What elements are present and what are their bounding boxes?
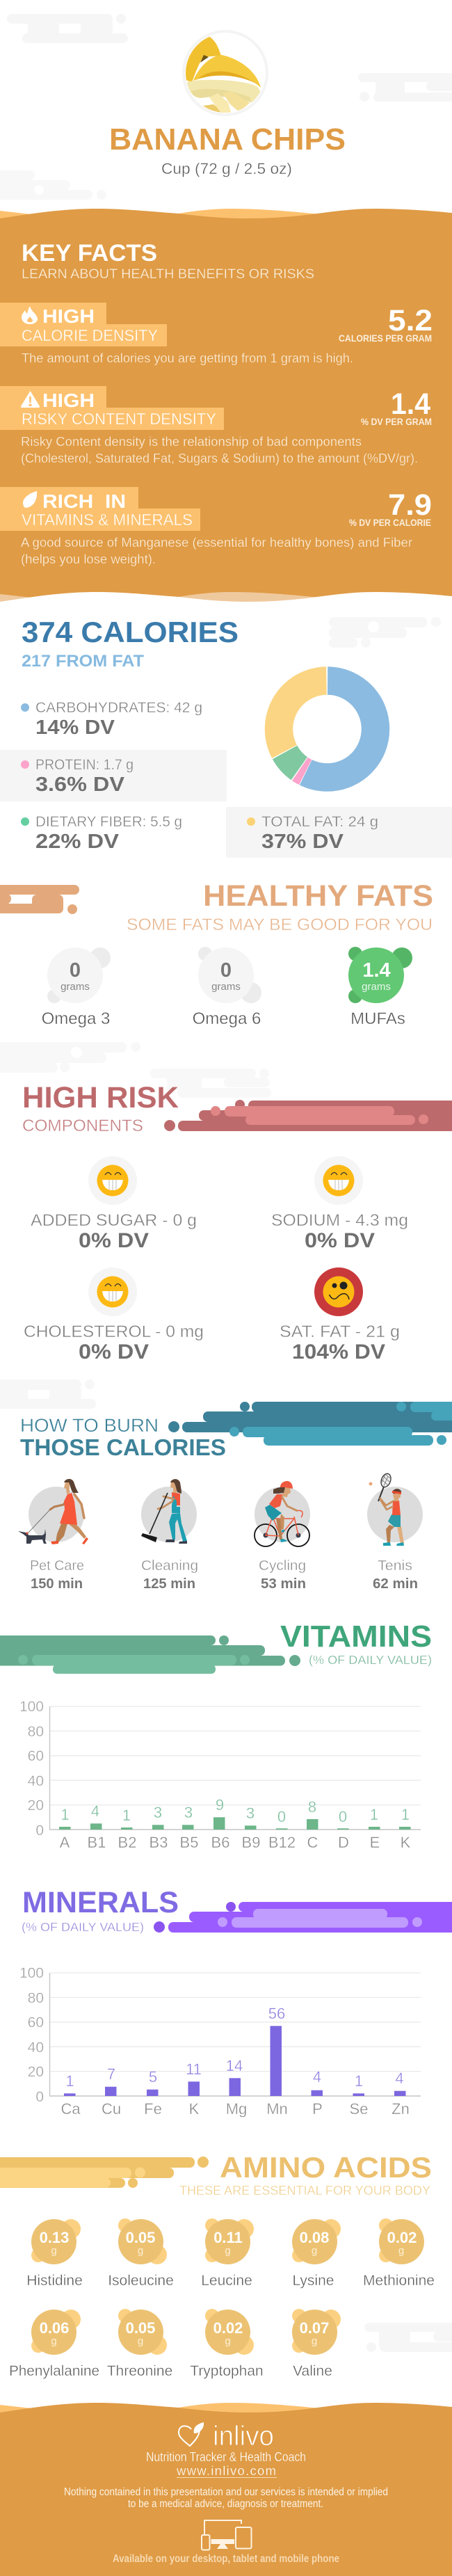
grid <box>50 1706 421 1805</box>
subheading: from fat: 217 FROM FAT <box>22 652 144 671</box>
bar values: 56 <box>268 2005 285 2022</box>
amino: leucine <box>201 2218 254 2289</box>
y axis labels: 40 <box>28 2040 44 2056</box>
omega 6 badge: grams <box>211 981 241 993</box>
heading: key facts: KEY FACTS <box>22 240 157 266</box>
wave top light <box>0 209 320 220</box>
x axis labels: Ca <box>60 2100 81 2118</box>
activity: cycling <box>255 1481 310 1592</box>
risk item: cholesterol: 0% DV <box>79 1341 149 1363</box>
omega 6 badge: 0 <box>220 959 232 982</box>
logo: heart and leaf <box>179 2422 204 2446</box>
legend: dietary fiber <box>21 814 182 853</box>
x axis labels: K <box>189 2100 200 2118</box>
y axis labels: 20 <box>28 2064 44 2080</box>
bar values <box>65 2005 404 2090</box>
unit: % DV PER CALORIE <box>349 518 431 528</box>
bar values: 5 <box>149 2068 157 2086</box>
background cloud <box>329 617 441 648</box>
icon: leaf <box>23 491 37 508</box>
bar values: 3 <box>154 1804 162 1821</box>
panel: vitamins <box>0 1619 432 1851</box>
x axis labels: Mn <box>266 2100 288 2118</box>
x axis labels: P <box>312 2100 323 2118</box>
disclaimer: Nothing contained in this presentation and our services is intended or implied <box>64 2486 388 2498</box>
amino: histidine <box>26 2219 83 2289</box>
unit: CALORIES PER GRAM <box>339 333 432 344</box>
legend: protein: PROTEIN: 1.7 g <box>35 757 134 773</box>
activity: pet care: Pet Care <box>30 1558 84 1574</box>
heading: VITAMINS <box>280 1619 432 1654</box>
y axis labels: 100 <box>19 1699 44 1715</box>
label background <box>0 487 200 531</box>
background cloud top left <box>7 14 128 43</box>
unit: % DV PER GRAM <box>361 417 432 427</box>
x axis labels: A <box>60 1834 70 1851</box>
y axis labels: 100 <box>19 1965 44 1981</box>
bar values: 1 <box>60 1806 70 1823</box>
amino: lysine: 0.08 <box>300 2229 329 2246</box>
x axis labels <box>60 2100 410 2118</box>
activity: cleaning: Cleaning <box>141 1558 198 1574</box>
risk item: cholesterol <box>24 1267 204 1363</box>
amino: phenylalanine: g <box>51 2335 57 2347</box>
panel: minerals <box>19 1886 452 2118</box>
name: CALORIE DENSITY <box>22 326 158 344</box>
x axis labels: C <box>307 1834 318 1851</box>
legend: total fat <box>247 814 378 853</box>
amino: histidine: g <box>51 2245 57 2257</box>
value: 5.2 <box>388 304 433 337</box>
activity: cleaning: 125 min <box>143 1576 195 1592</box>
gray row total fat <box>226 807 452 858</box>
amino: valine: Valine <box>293 2363 332 2379</box>
subheading: (% OF DAILY VALUE) <box>22 1920 144 1934</box>
background cloud above burn section <box>0 1379 96 1409</box>
level: HIGH <box>42 305 95 327</box>
disclaimer <box>64 2486 388 2510</box>
label background <box>0 386 224 430</box>
x axis labels: Cu <box>102 2100 121 2118</box>
legend: carbohydrates: 14% DV <box>35 717 115 739</box>
bar values: 4 <box>91 1802 99 1820</box>
mufas badge <box>348 947 412 1028</box>
bar values: 1 <box>401 1806 410 1823</box>
amino: threonine: 0.05 <box>126 2319 155 2337</box>
amino: lysine: Lysine <box>293 2273 334 2289</box>
bar values: 8 <box>308 1798 316 1816</box>
fact: rich in vitamins and minerals <box>0 487 432 566</box>
availability note: Available on your desktop, tablet and mobile phone <box>113 2553 339 2565</box>
level: RICH IN <box>42 490 126 512</box>
mufas badge: MUFAs <box>350 1009 405 1028</box>
illustration: woman cycling <box>255 1481 310 1546</box>
heading line 2: THOSE CALORIES <box>20 1434 226 1460</box>
background cloud <box>364 2323 452 2352</box>
bar values: 9 <box>216 1796 224 1814</box>
y axis labels: 20 <box>28 1798 44 1814</box>
x axis labels: B6 <box>211 1834 229 1851</box>
description <box>21 536 412 566</box>
legend: total fat: 37% DV <box>261 831 344 853</box>
risk item: added sugar: 0% DV <box>79 1229 149 1252</box>
axes <box>50 1706 421 1830</box>
x axis labels: D <box>338 1834 349 1851</box>
tagline: Nutrition Tracker & Health Coach <box>146 2449 306 2464</box>
activity: tennis: Tenis <box>378 1558 412 1574</box>
icon: flame <box>22 306 38 324</box>
x axis labels: Fe <box>144 2100 162 2118</box>
amino: lysine <box>292 2219 341 2289</box>
illustration: man playing tennis <box>367 1472 423 1546</box>
risk item: saturated fat: 104% DV <box>292 1341 385 1363</box>
amino: isoleucine: Isoleucine <box>108 2273 174 2289</box>
bar values: 0 <box>277 1808 286 1825</box>
description: A good source of Manganese (essential for healthy bones) and Fiber <box>21 536 412 550</box>
amino: phenylalanine: 0.06 <box>40 2319 69 2337</box>
amino: threonine: g <box>138 2335 143 2347</box>
x axis labels: Mg <box>226 2100 247 2118</box>
risk item: added sugar: ADDED SUGAR - 0 g <box>31 1211 197 1230</box>
subheading: LEARN ABOUT HEALTH BENEFITS OR RISKS <box>22 266 314 282</box>
decorative cloud <box>168 1402 452 1446</box>
amino: phenylalanine: Phenylalanine <box>9 2363 99 2379</box>
amino: tryptophan: 0.02 <box>213 2319 243 2337</box>
risk item: sodium <box>271 1156 408 1252</box>
icon: smiley <box>88 1267 137 1316</box>
axes <box>50 1973 421 2096</box>
panel: footer <box>0 2403 452 2576</box>
heading: HEALTHY FATS <box>203 879 433 913</box>
mufas badge: 1.4 <box>362 959 391 982</box>
amino: valine: 0.07 <box>300 2319 329 2337</box>
activity: pet care <box>18 1479 88 1592</box>
background cloud left <box>0 170 106 200</box>
y axis labels: 60 <box>28 1748 44 1764</box>
x axis labels: E <box>370 1834 380 1851</box>
heading line 1: HOW TO BURN <box>20 1415 159 1436</box>
description <box>21 435 418 465</box>
activity: tennis <box>367 1472 423 1592</box>
disclaimer: to be a medical advice, diagnosis or treatment. <box>128 2498 323 2510</box>
value: 7.9 <box>388 488 432 522</box>
title: BANANA CHIPS <box>109 122 346 157</box>
bar values: 7 <box>107 2065 115 2083</box>
y axis labels: 40 <box>28 1773 44 1789</box>
website link: www.inlivo.com <box>176 2463 276 2478</box>
omega 6 badge <box>193 947 261 1028</box>
mufas badge: grams <box>362 981 391 993</box>
amino: histidine: 0.13 <box>40 2229 69 2246</box>
amino: tryptophan: g <box>225 2335 231 2347</box>
subheading: SOME FATS MAY BE GOOD FOR YOU <box>127 915 433 934</box>
x axis labels: Se <box>350 2100 368 2118</box>
omega 6 badge: Omega 6 <box>193 1009 261 1028</box>
amino: methionine: g <box>398 2245 404 2257</box>
bar values: 3 <box>184 1804 193 1821</box>
bar values: 14 <box>226 2057 243 2074</box>
bar values: 1 <box>355 2072 363 2090</box>
y axis labels: 80 <box>28 1990 44 2006</box>
risk item: saturated fat: SAT. FAT - 21 g <box>280 1322 400 1341</box>
amino: isoleucine <box>108 2218 174 2289</box>
bar values: 3 <box>246 1805 255 1822</box>
x axis labels: B2 <box>118 1834 136 1851</box>
y axis labels: 80 <box>28 1724 44 1740</box>
amino: valine: g <box>312 2335 317 2347</box>
decorative cloud <box>0 2157 209 2188</box>
amino: histidine: Histidine <box>26 2273 83 2289</box>
description: (helps you lose weight). <box>21 552 156 566</box>
bars <box>64 2026 406 2096</box>
amino: lysine: g <box>312 2245 317 2257</box>
orange background <box>0 2403 452 2576</box>
heading: HIGH RISK <box>22 1081 179 1114</box>
x axis labels: B9 <box>242 1834 260 1851</box>
wave light <box>0 2403 320 2414</box>
wave bottom <box>0 592 320 603</box>
amino: leucine: 0.11 <box>213 2229 243 2246</box>
y axis labels: 0 <box>35 2089 44 2105</box>
amino: threonine <box>107 2309 172 2379</box>
legend: dietary fiber: 22% DV <box>35 831 120 853</box>
heading: MINERALS <box>22 1886 179 1919</box>
serving size: Cup (72 g / 2.5 oz) <box>161 160 292 177</box>
y axis labels <box>19 1965 44 2105</box>
amino: methionine: 0.02 <box>387 2229 417 2246</box>
risk item: saturated fat <box>280 1267 400 1363</box>
name: RISKY CONTENT DENSITY <box>22 410 216 428</box>
bar values: 4 <box>395 2070 404 2087</box>
legend: carbohydrates: CARBOHYDRATES: 42 g <box>35 700 202 716</box>
illustration: woman sweeping <box>141 1479 197 1544</box>
activity: cycling: Cycling <box>259 1558 306 1574</box>
activity: cycling: 53 min <box>261 1576 306 1592</box>
description: (Cholesterol, Saturated Fat, Sugars & Sodium) to the amount (%DV/gr). <box>21 451 418 465</box>
label background <box>0 303 167 346</box>
amino: tryptophan <box>190 2309 264 2379</box>
bar values: 0 <box>339 1808 347 1825</box>
bar values: 4 <box>313 2068 321 2086</box>
activity: pet care: 150 min <box>31 1576 83 1592</box>
bar values: 1 <box>122 1807 131 1824</box>
description: The amount of calories you are getting from 1 gram is high. <box>22 351 353 365</box>
amino: isoleucine: 0.05 <box>126 2229 155 2246</box>
icon: smiley <box>314 1156 363 1205</box>
legend: protein <box>21 757 134 796</box>
amino: isoleucine: g <box>138 2245 143 2257</box>
panel: healthy fats <box>0 879 433 1028</box>
amino: valine <box>292 2309 341 2379</box>
x axis labels: B5 <box>180 1834 198 1851</box>
y axis labels: 0 <box>35 1823 44 1839</box>
legend: total fat: TOTAL FAT: 24 g <box>261 814 378 830</box>
subheading: (% OF DAILY VALUE) <box>309 1653 432 1667</box>
x axis labels: B1 <box>88 1834 106 1851</box>
decorative cloud <box>0 1635 300 1674</box>
bar values <box>60 1796 410 1825</box>
panel: calories <box>0 616 452 858</box>
amino: threonine: Threonine <box>107 2363 172 2379</box>
omega 3 badge: 0 <box>70 959 81 982</box>
bar values: 11 <box>186 2061 202 2078</box>
omega 3 badge: grams <box>60 981 90 993</box>
fact: risky content density <box>0 386 432 465</box>
subheading: COMPONENTS <box>22 1117 143 1135</box>
risk item: sodium: SODIUM - 4.3 mg <box>271 1211 408 1230</box>
panel: high risk components <box>22 1081 452 1363</box>
logo wordmark: inlivo <box>213 2421 274 2451</box>
x axis labels: K <box>401 1834 411 1851</box>
risk item: added sugar <box>31 1156 197 1252</box>
grid <box>50 1973 421 2072</box>
name: VITAMINS & MINERALS <box>22 511 193 529</box>
bar chart: vitamins <box>19 1699 421 1851</box>
amino: methionine <box>363 2218 435 2289</box>
decorative cloud <box>0 885 79 914</box>
header panel <box>7 14 452 177</box>
heading: calories: 374 CALORIES <box>22 616 239 648</box>
legend: protein: 3.6% DV <box>35 774 125 796</box>
icon: devices <box>202 2520 252 2550</box>
value: 1.4 <box>391 387 430 421</box>
y axis labels: 60 <box>28 2015 44 2031</box>
orange background <box>0 209 452 605</box>
panel: key facts <box>0 209 452 609</box>
x axis labels: Zn <box>392 2100 410 2118</box>
amino: methionine: Methionine <box>363 2273 435 2289</box>
risk item: cholesterol: CHOLESTEROL - 0 mg <box>24 1322 204 1341</box>
x axis labels: B3 <box>150 1834 168 1851</box>
activity: cleaning <box>141 1479 198 1592</box>
x axis labels: B12 <box>268 1834 296 1851</box>
gray row protein <box>0 750 227 801</box>
donut chart <box>279 680 376 778</box>
level: HIGH <box>42 390 95 411</box>
heading: AMINO ACIDS <box>220 2151 432 2184</box>
omega 3 badge: Omega 3 <box>42 1009 110 1028</box>
risk item: sodium: 0% DV <box>305 1229 375 1252</box>
bar values: 1 <box>65 2072 74 2090</box>
bar values: 1 <box>370 1806 378 1823</box>
amino: leucine: Leucine <box>201 2273 252 2289</box>
icon: warning triangle <box>21 391 40 408</box>
amino: phenylalanine <box>9 2310 99 2379</box>
food photo: banana <box>182 30 268 118</box>
amino: tryptophan: Tryptophan <box>190 2363 264 2379</box>
amino: leucine: g <box>225 2245 231 2257</box>
bar chart: minerals <box>19 1965 421 2118</box>
omega 3 badge <box>42 947 111 1028</box>
icon: worried face <box>314 1267 363 1316</box>
fact: calorie density <box>0 303 433 365</box>
activity: tennis: 62 min <box>373 1576 418 1592</box>
background cloud right <box>358 73 452 102</box>
legend: dietary fiber: DIETARY FIBER: 5.5 g <box>35 814 182 830</box>
decorative cloud <box>164 1100 452 1131</box>
icon: smiley <box>88 1156 137 1205</box>
panel: how to burn calories <box>18 1402 452 1592</box>
decorative cloud <box>154 1902 452 1933</box>
x axis labels <box>60 1834 411 1851</box>
y axis labels <box>19 1699 44 1839</box>
description: Risky Content density is the relationship of bad components <box>21 435 362 449</box>
background clouds above high risk <box>0 1042 271 1098</box>
illustration: woman walking dog <box>18 1479 88 1544</box>
panel: amino acids <box>0 2151 452 2379</box>
bars <box>59 1817 410 1830</box>
legend: carbohydrates <box>21 700 202 739</box>
subheading: THESE ARE ESSENTIAL FOR YOUR BODY <box>179 2183 430 2198</box>
